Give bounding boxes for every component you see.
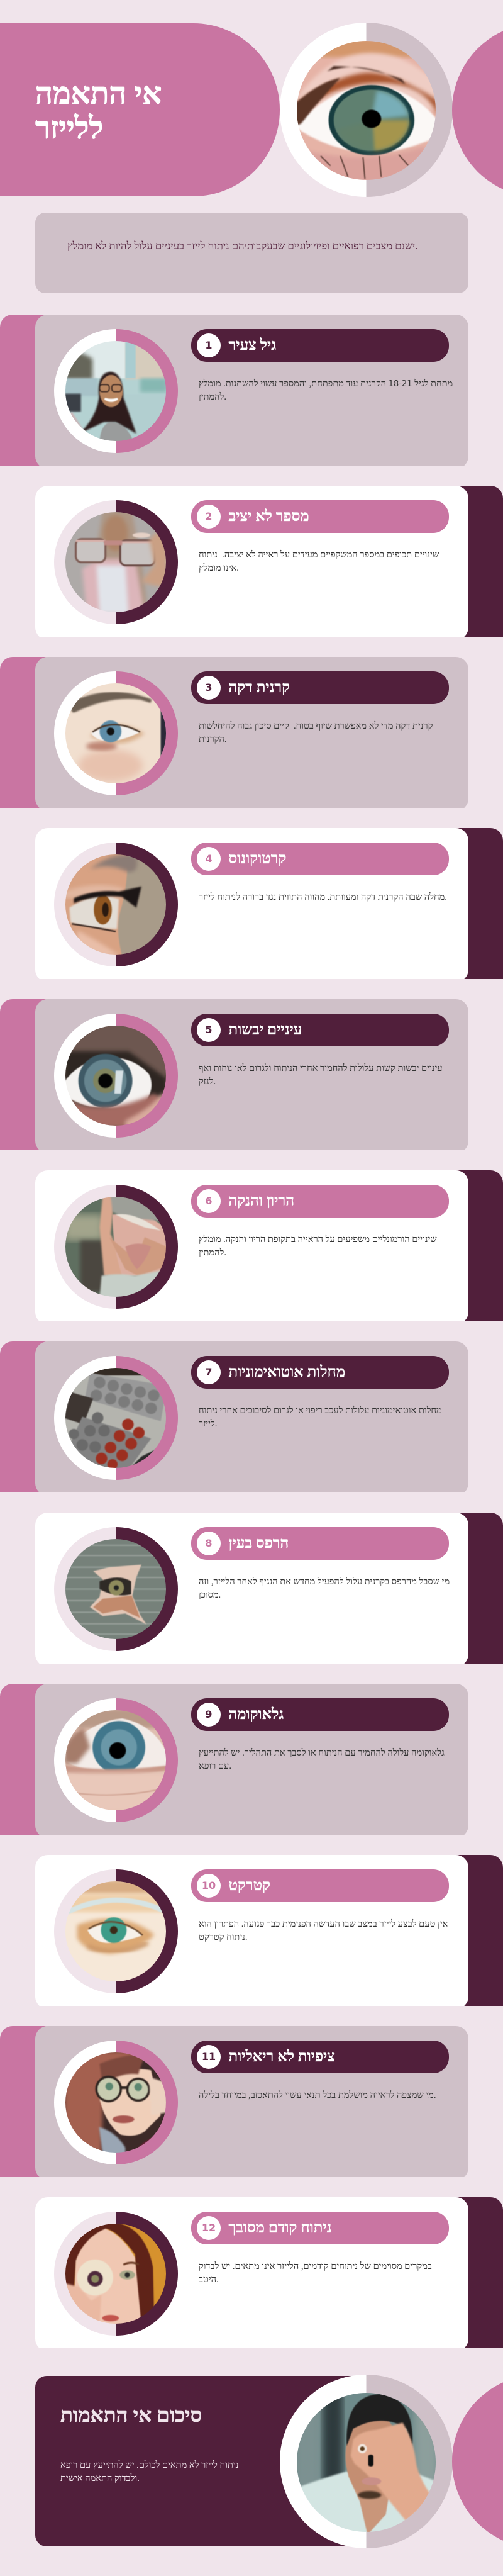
heading pill — [191, 1014, 449, 1046]
side tab — [0, 1684, 57, 1847]
body text: מי שמצפה לראייה מושלמת בכל תנאי עשוי להתאכזב, במיוחד בלילה. — [199, 2090, 436, 2100]
number — [197, 1018, 221, 1042]
decorative right circle summary — [452, 2375, 503, 2548]
summary text — [60, 2460, 238, 2484]
panel background — [35, 657, 468, 811]
body text — [199, 2261, 432, 2284]
body text: קרנית דקה מדי לא מאפשרת שיוף בטוח. קיים סיכון גבוה להיחלשות — [199, 721, 433, 731]
photo ring — [54, 329, 177, 453]
summary photo ring — [280, 2375, 453, 2548]
heading pill — [191, 1185, 449, 1218]
summary panel — [35, 2376, 387, 2546]
number — [197, 2045, 221, 2069]
photo: green eye close-up — [297, 41, 436, 180]
photo: woman holding glasses — [65, 512, 166, 612]
body text — [199, 550, 439, 573]
number — [197, 1360, 221, 1384]
title — [35, 77, 162, 145]
body text: הקרנית. — [199, 734, 227, 744]
photo: woman with flower over eye — [65, 2224, 166, 2324]
decorative right circle header — [452, 23, 503, 197]
body text: היטב. — [199, 2274, 219, 2284]
card 1: young age — [0, 315, 468, 466]
photo: blue eye with wrinkled lid — [65, 1710, 166, 1810]
photo: eye through torn paper — [65, 1539, 166, 1639]
photo: side view brown eye — [65, 854, 166, 955]
heading: ציפיות לא ריאליות — [229, 2049, 335, 2065]
photo ring — [54, 1356, 177, 1480]
body text — [199, 1406, 442, 1428]
side tab — [446, 486, 503, 649]
photo: face with blue eye — [65, 683, 166, 783]
body text: במקרים מסוימים של ניתוחים קודמים, הלייזר אינו מתאים. יש לבדוק — [199, 2261, 432, 2271]
body text: שינויים הורמונליים משפיעים על הראייה בתקופת הריון והנקה. מומלץ — [199, 1235, 437, 1245]
number: 10 — [202, 1879, 216, 1891]
heading pill — [191, 500, 449, 533]
side tab — [446, 2197, 503, 2361]
number: 5 — [205, 1024, 213, 1036]
number: 7 — [205, 1366, 213, 1378]
number: 9 — [205, 1708, 213, 1720]
body text — [199, 1748, 445, 1771]
body text: ניתוח קטרקט. — [199, 1932, 248, 1942]
number: 4 — [205, 853, 213, 865]
photo: woman with round glasses — [65, 2052, 166, 2153]
heading pill — [191, 2212, 449, 2244]
side tab — [446, 828, 503, 992]
heading: קטרקט — [229, 1878, 270, 1894]
number — [197, 676, 221, 700]
title: ללייזר — [35, 112, 103, 145]
number: 12 — [202, 2222, 216, 2234]
card 10: cataract — [35, 1855, 503, 2006]
body text — [199, 1235, 437, 1257]
number — [197, 847, 221, 871]
number: 8 — [205, 1537, 213, 1549]
summary text: ולבדוק התאמה אישית. — [60, 2473, 140, 2484]
card 12: complicated previous surgery — [35, 2197, 503, 2348]
body text — [199, 1063, 443, 1086]
number — [197, 333, 221, 357]
body text: גלאוקומה עלולה להחמיר עם הניתוח או לסבך את התהליך. יש להתייעץ — [199, 1748, 445, 1758]
panel background — [35, 1341, 468, 1496]
summary title: סיכום אי התאמות — [60, 2404, 202, 2427]
heading: עיניים יבשות — [229, 1022, 302, 1038]
number — [197, 1189, 221, 1213]
photo ring — [54, 1698, 177, 1822]
photo: smiling woman in street — [65, 341, 166, 441]
heading: קרנית דקה — [229, 680, 290, 696]
header photo ring — [280, 23, 453, 197]
intro panel — [35, 213, 468, 293]
card 5: dry eyes — [0, 999, 468, 1150]
card 2: unstable prescription — [35, 486, 503, 637]
panel background — [35, 1513, 468, 1667]
card 4: keratoconus — [35, 828, 503, 979]
body text: שינויים תכופים במספר המשקפיים מעידים על ראייה לא יציבה. ניתוח — [199, 550, 439, 560]
photo: pregnant belly with hands — [65, 1197, 166, 1297]
photo ring — [54, 1014, 177, 1138]
card 9: glaucoma — [0, 1684, 468, 1835]
body text: מסוכן. — [199, 1589, 221, 1599]
body text: מחלות אוטואימוניות עלולות לעכב ריפוי או לגרום לסיבוכים אחרי ניתוח — [199, 1406, 442, 1416]
intro text: ישנם מצבים רפואיים ופיזיולוגיים שבעקבותיהם ניתוח לייזר בעיניים עלול להיות לא מומלץ. — [67, 240, 417, 252]
photo: green eye with white band — [65, 1881, 166, 1981]
heading pill — [191, 1869, 449, 1902]
side tab — [0, 999, 57, 1163]
summary text: ניתוח לייזר לא מתאים לכולם. יש להתייעץ עם רופא — [60, 2460, 238, 2470]
photo: blister packs with pills — [65, 1368, 166, 1468]
photo ring — [54, 843, 177, 966]
number — [197, 1874, 221, 1898]
heading: קרטוקונוס — [229, 851, 286, 867]
body text: מי שסבל מהרפס בקרנית עלול להפעיל מחדש את הנגיף לאחר הלייזר, וזה — [199, 1577, 450, 1587]
body text: אינו מומלץ. — [199, 563, 239, 573]
body text — [199, 721, 433, 744]
panel background — [35, 2026, 468, 2180]
title: אי התאמה — [35, 77, 162, 111]
photo ring — [54, 2041, 177, 2164]
heading pill — [191, 1698, 449, 1731]
panel background — [35, 486, 468, 640]
body text: לייזר. — [199, 1418, 217, 1428]
card 8: eye herpes — [35, 1513, 503, 1664]
number — [197, 1532, 221, 1555]
side tab — [446, 1513, 503, 1676]
body text: להמתין. — [199, 1247, 226, 1257]
number — [197, 1703, 221, 1727]
side tab — [0, 657, 57, 820]
number: 11 — [202, 2051, 216, 2063]
number: 3 — [205, 681, 213, 693]
photo: man covering eye with hand — [297, 2393, 436, 2532]
heading pill — [191, 843, 449, 875]
body text — [199, 379, 453, 401]
body text: עם רופא. — [199, 1761, 231, 1771]
side tab — [446, 1855, 503, 2019]
card 3: thin cornea — [0, 657, 468, 808]
side tab — [0, 2026, 57, 2190]
heading: הריון והנקה — [229, 1193, 294, 1209]
photo ring — [54, 1869, 177, 1993]
heading pill — [191, 1527, 449, 1560]
body text — [199, 1919, 448, 1942]
side tab — [0, 315, 57, 478]
heading pill — [191, 329, 449, 362]
header pink banner — [0, 23, 280, 196]
number: 2 — [205, 510, 213, 522]
body text: עיניים יבשות קשות עלולות להחמיר אחרי הניתוח ולגרום לאי נוחות ואף — [199, 1063, 443, 1073]
heading pill — [191, 1356, 449, 1389]
heading: הרפס בעין — [229, 1535, 289, 1552]
card 11: unrealistic expectations — [0, 2026, 468, 2177]
photo ring — [54, 500, 177, 624]
body text: מתחת לגיל 18-21 הקרנית עוד מתפתחת, והמספר עשוי להשתנות. מומלץ — [199, 379, 453, 389]
body text: מחלה שבה הקרנית דקה ומעוותת. מהווה התווית נגד ברורה לניתוח לייזר. — [199, 892, 447, 902]
number: 1 — [205, 339, 213, 351]
heading: גיל צעיר — [229, 337, 276, 354]
panel background — [35, 1684, 468, 1838]
photo ring — [54, 1527, 177, 1651]
number — [197, 2216, 221, 2240]
card 6: pregnancy and nursing — [35, 1170, 503, 1321]
body text: אין טעם לבצע לייזר במצב שבו העדשה הפנימית כבר פגועה. הפתרון הוא — [199, 1919, 448, 1929]
side tab — [446, 1170, 503, 1334]
body text: להמתין. — [199, 391, 226, 401]
heading: גלאוקומה — [229, 1706, 284, 1723]
heading: ניתוח קודם מסובך — [229, 2220, 331, 2236]
number: 6 — [205, 1195, 213, 1207]
photo ring — [54, 671, 177, 795]
panel background — [35, 315, 468, 469]
heading: מספר לא יציב — [229, 508, 309, 525]
panel background — [35, 2197, 468, 2351]
photo ring — [54, 1185, 177, 1309]
number — [197, 505, 221, 529]
panel background — [35, 1855, 468, 2009]
side tab — [0, 1341, 57, 1505]
heading pill — [191, 2041, 449, 2073]
card 7: autoimmune diseases — [0, 1341, 468, 1492]
heading pill — [191, 671, 449, 704]
panel background — [35, 828, 468, 982]
heading: מחלות אוטואימוניות — [229, 1364, 345, 1380]
panel background — [35, 999, 468, 1153]
body text: לנזק. — [199, 1076, 216, 1086]
photo ring — [54, 2212, 177, 2336]
panel background — [35, 1170, 468, 1324]
photo: teal eye close-up — [65, 1026, 166, 1126]
body text — [199, 1577, 450, 1599]
